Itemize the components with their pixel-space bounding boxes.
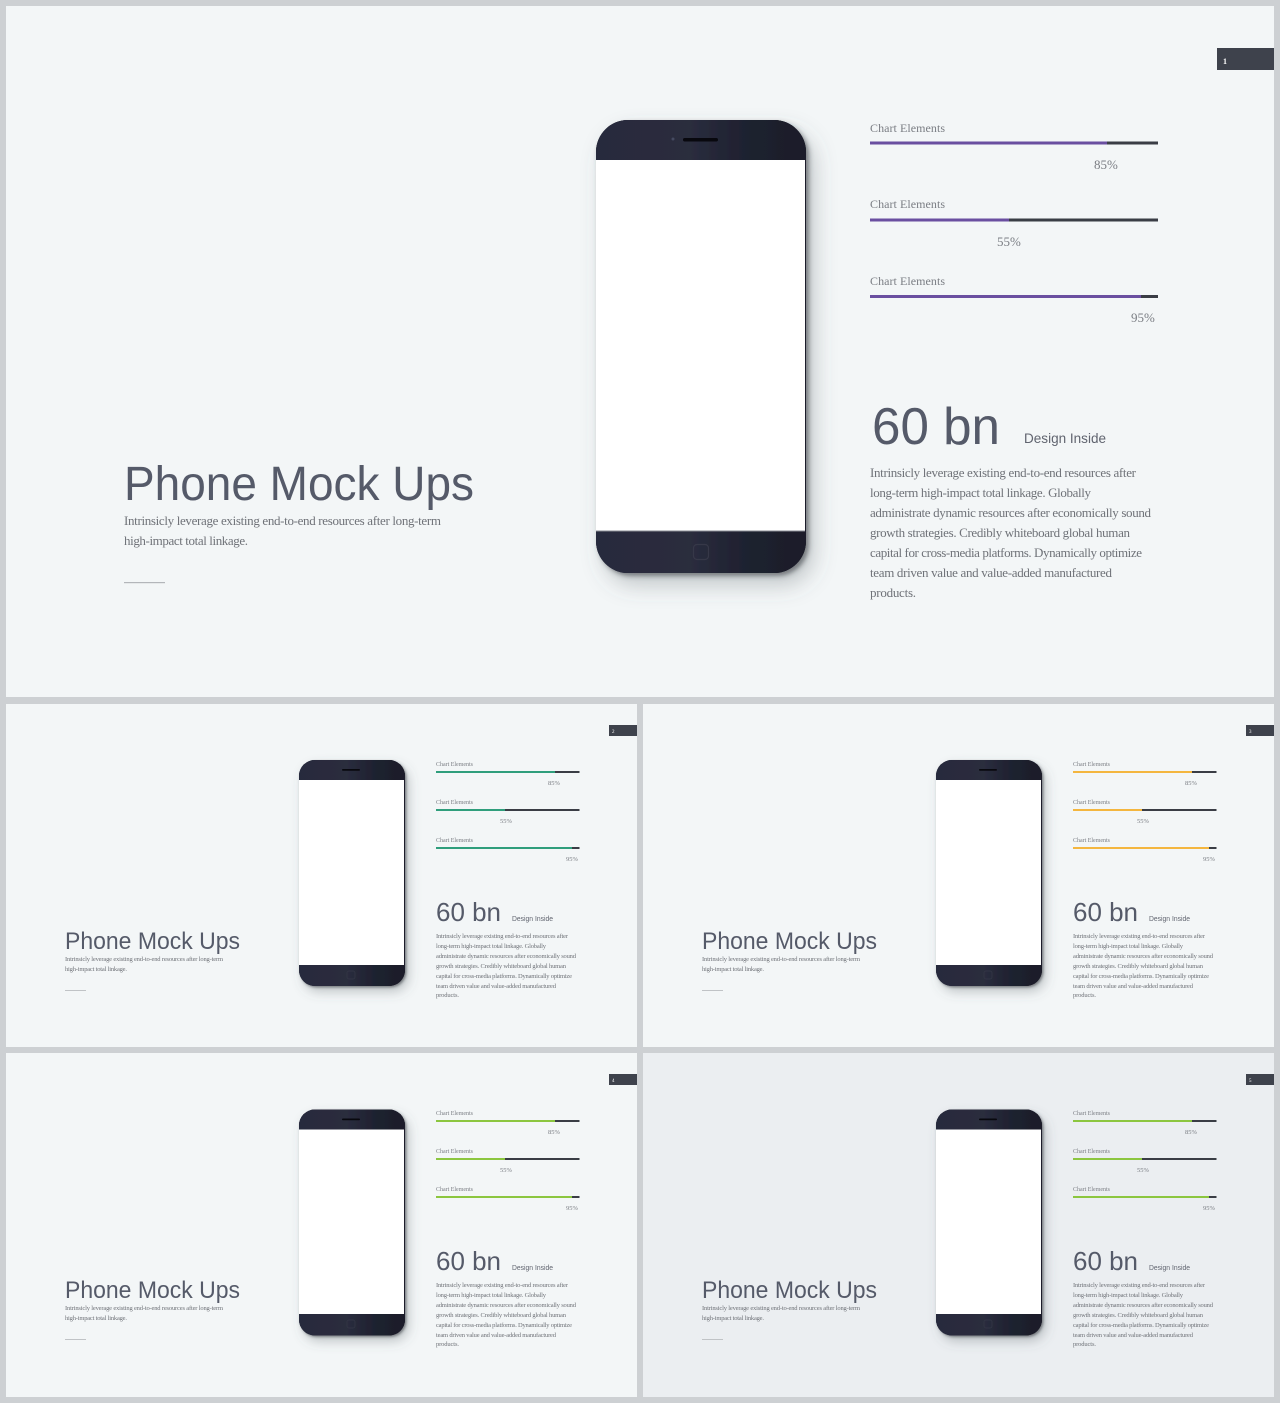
subtitle text: high-impact total linkage. <box>65 966 127 973</box>
panel: slide 4 <box>6 1053 637 1397</box>
body text <box>436 1282 577 1348</box>
subtitle text <box>65 956 223 973</box>
body text: products. <box>436 1341 459 1348</box>
icon: phone mockup <box>299 1110 405 1336</box>
bar 85% <box>1073 1111 1216 1136</box>
big stat: 60 bn <box>1073 897 1138 927</box>
body text: long-term high-impact total linkage. Globally <box>1073 943 1184 950</box>
page tag 1 <box>1217 48 1274 70</box>
chart: progress bars <box>436 762 580 863</box>
bar 85%: Chart Elements <box>870 121 945 135</box>
body text: products. <box>870 585 916 600</box>
panel: slide 2 <box>6 704 637 1047</box>
body text: Intrinsicly leverage existing end-to-end resources after <box>870 465 1137 480</box>
bar 85% <box>436 1111 580 1136</box>
bar 85%: 85% <box>1185 1129 1198 1136</box>
page tag 3: 3 <box>1249 730 1252 735</box>
subtitle text: high-impact total linkage. <box>702 1315 764 1322</box>
bar 55%: 55% <box>500 1167 512 1174</box>
title: Phone Mock Ups <box>702 1277 877 1304</box>
body text: team driven value and value-added manufactured <box>436 1332 557 1339</box>
bar 55%: 55% <box>1137 1167 1150 1174</box>
bar 95%: Chart Elements <box>1073 1187 1111 1193</box>
bar 95% <box>870 274 1158 325</box>
title: Phone Mock Ups <box>65 928 240 955</box>
bar 55% <box>870 197 1158 249</box>
short rule <box>702 990 723 991</box>
body text: long-term high-impact total linkage. Globally <box>436 943 547 950</box>
title: Phone Mock Ups <box>65 1277 240 1304</box>
big stat: 60 bn <box>436 1246 501 1276</box>
stat label: Design Inside <box>1149 916 1190 923</box>
body text: capital for cross-media platforms. Dynamically optimize <box>1073 973 1209 980</box>
bar 55%: 55% <box>500 818 512 825</box>
bar 85%: 85% <box>1094 157 1118 172</box>
body text: growth strategies. Credibly whiteboard global human <box>1073 1312 1204 1319</box>
body text: growth strategies. Credibly whiteboard global human <box>870 525 1130 540</box>
bar 55%: Chart Elements <box>1073 800 1111 806</box>
bar 95% <box>1073 838 1216 863</box>
icon: phone mockup <box>936 760 1042 986</box>
subtitle text: Intrinsicly leverage existing end-to-end resources after long-term <box>124 513 441 528</box>
body text: Intrinsicly leverage existing end-to-end resources after <box>1073 933 1206 940</box>
body text: administrate dynamic resources after economically sound <box>1073 1302 1214 1309</box>
body text: growth strategies. Credibly whiteboard global human <box>1073 963 1204 970</box>
body text: products. <box>1073 992 1096 999</box>
panel: slide 5 <box>643 1053 1274 1397</box>
bar 85%: Chart Elements <box>436 1111 474 1117</box>
title: Phone Mock Ups <box>702 928 877 955</box>
bar 55% <box>436 800 580 825</box>
chart: progress bars <box>436 1111 580 1212</box>
body text: administrate dynamic resources after economically sound <box>436 1302 577 1309</box>
bar 95%: 95% <box>566 856 578 863</box>
page tag 5: 5 <box>1249 1079 1252 1084</box>
subtitle text: Intrinsicly leverage existing end-to-end resources after long-term <box>65 956 223 963</box>
bar 85%: 85% <box>548 1129 560 1136</box>
bar 95%: 95% <box>1203 856 1216 863</box>
stat label: Design Inside <box>512 916 553 923</box>
page tag 2: 2 <box>612 730 615 735</box>
body text: capital for cross-media platforms. Dynamically optimize <box>1073 1322 1209 1329</box>
chart: progress bars <box>1073 762 1216 863</box>
bar 95%: 95% <box>1203 1205 1216 1212</box>
body text: team driven value and value-added manufactured <box>870 565 1112 580</box>
bar 85% <box>1073 762 1216 787</box>
bar 95%: Chart Elements <box>870 274 945 288</box>
bar 85%: 85% <box>548 780 560 787</box>
subtitle text <box>702 956 860 973</box>
subtitle text <box>65 1305 223 1322</box>
subtitle text: high-impact total linkage. <box>702 966 764 973</box>
body text: administrate dynamic resources after economically sound <box>1073 953 1214 960</box>
body text: growth strategies. Credibly whiteboard global human <box>436 963 567 970</box>
body text: products. <box>1073 1341 1096 1348</box>
short rule <box>702 1339 723 1340</box>
bar 95% <box>1073 1187 1216 1212</box>
body text: Intrinsicly leverage existing end-to-end resources after <box>436 1282 569 1289</box>
big stat: 60 bn <box>872 398 1000 456</box>
bar 95%: 95% <box>566 1205 578 1212</box>
body text: administrate dynamic resources after economically sound <box>436 953 577 960</box>
page tag 4 <box>609 1074 637 1085</box>
bar 95% <box>436 1187 580 1212</box>
subtitle text <box>124 513 441 548</box>
stat label: Design Inside <box>512 1265 553 1272</box>
page tag 4: 4 <box>612 1079 615 1084</box>
stat label: Design Inside <box>1149 1265 1190 1272</box>
bar 55%: 55% <box>997 234 1021 249</box>
body text: team driven value and value-added manufactured <box>1073 1332 1194 1339</box>
body text: long-term high-impact total linkage. Globally <box>1073 1292 1184 1299</box>
bar 85%: Chart Elements <box>1073 762 1111 768</box>
icon: phone mockup <box>299 760 405 986</box>
subtitle text: high-impact total linkage. <box>65 1315 127 1322</box>
page tag 3 <box>1246 725 1274 736</box>
chart: progress bars <box>870 121 1158 325</box>
bar 55%: 55% <box>1137 818 1150 825</box>
chart: progress bars <box>1073 1111 1216 1212</box>
subtitle text: Intrinsicly leverage existing end-to-end resources after long-term <box>702 956 860 963</box>
title: Phone Mock Ups <box>124 458 474 511</box>
body text: growth strategies. Credibly whiteboard global human <box>436 1312 567 1319</box>
bar 55%: Chart Elements <box>436 800 474 806</box>
bar 85%: Chart Elements <box>1073 1111 1111 1117</box>
bar 85% <box>870 121 1158 172</box>
body text: team driven value and value-added manufactured <box>1073 983 1194 990</box>
bar 55% <box>436 1149 580 1174</box>
big stat: 60 bn <box>1073 1246 1138 1276</box>
bar 55%: Chart Elements <box>436 1149 474 1155</box>
page tag 5 <box>1246 1074 1274 1085</box>
short rule <box>65 990 86 991</box>
bar 95%: Chart Elements <box>1073 838 1111 844</box>
body text <box>870 465 1152 600</box>
icon: phone mockup <box>936 1110 1042 1336</box>
panel: slide 1 <box>6 6 1274 697</box>
body text <box>436 933 577 999</box>
body text: Intrinsicly leverage existing end-to-end resources after <box>1073 1282 1206 1289</box>
subtitle text: high-impact total linkage. <box>124 533 248 548</box>
body text: team driven value and value-added manufactured <box>436 983 557 990</box>
bar 95%: Chart Elements <box>436 1187 474 1193</box>
bar 85%: 85% <box>1185 780 1198 787</box>
body text: capital for cross-media platforms. Dynamically optimize <box>436 1322 572 1329</box>
subtitle text <box>702 1305 860 1322</box>
body text <box>1073 1282 1214 1348</box>
bar 55% <box>1073 1149 1216 1174</box>
bar 55% <box>1073 800 1216 825</box>
short rule <box>65 1339 86 1340</box>
subtitle text: Intrinsicly leverage existing end-to-end resources after long-term <box>65 1305 223 1312</box>
body text: administrate dynamic resources after economically sound <box>870 505 1152 520</box>
subtitle text: Intrinsicly leverage existing end-to-end resources after long-term <box>702 1305 860 1312</box>
bar 85%: Chart Elements <box>436 762 474 768</box>
bar 95%: Chart Elements <box>436 838 474 844</box>
page tag 2 <box>609 725 637 736</box>
bar 55%: Chart Elements <box>870 197 945 211</box>
page tag 1: 1 <box>1223 57 1227 66</box>
icon: phone mockup <box>596 120 806 573</box>
panel: slide 3 <box>643 704 1274 1047</box>
body text: long-term high-impact total linkage. Globally <box>870 485 1092 500</box>
body text: products. <box>436 992 459 999</box>
bar 95%: 95% <box>1131 310 1155 325</box>
short rule <box>124 582 165 583</box>
body text: Intrinsicly leverage existing end-to-end resources after <box>436 933 569 940</box>
body text: capital for cross-media platforms. Dynamically optimize <box>870 545 1142 560</box>
bar 95% <box>436 838 580 863</box>
stat label: Design Inside <box>1024 430 1106 446</box>
body text: capital for cross-media platforms. Dynamically optimize <box>436 973 572 980</box>
body text: long-term high-impact total linkage. Globally <box>436 1292 547 1299</box>
body text <box>1073 933 1214 999</box>
bar 85% <box>436 762 580 787</box>
big stat: 60 bn <box>436 897 501 927</box>
bar 55%: Chart Elements <box>1073 1149 1111 1155</box>
